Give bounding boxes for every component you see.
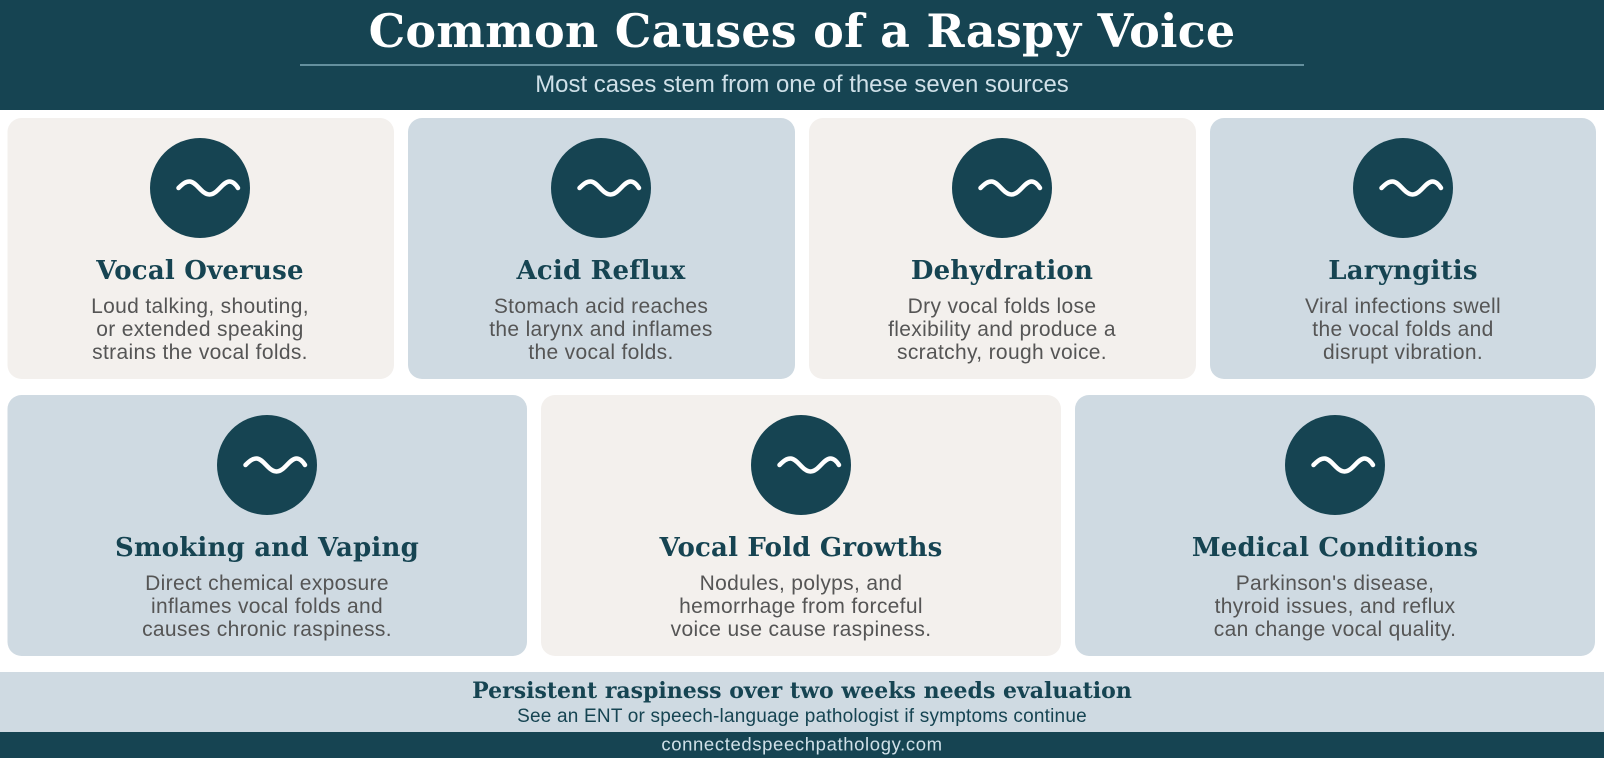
card: Dehydration: Dehydration xyxy=(911,256,1093,286)
card: Smoking and Vaping: causes chronic raspiness. xyxy=(142,618,392,641)
card: Smoking and Vaping: Smoking and Vaping xyxy=(115,533,419,563)
icon: sound wave xyxy=(551,138,651,238)
card: Medical Conditions: Medical Conditions xyxy=(1192,533,1478,563)
card: Acid Reflux xyxy=(408,118,795,379)
icon: sound wave xyxy=(751,415,851,515)
card: Laryngitis: Laryngitis xyxy=(1328,256,1478,286)
card: Laryngitis: disrupt vibration. xyxy=(1323,341,1483,364)
callout xyxy=(0,672,1604,732)
card: Smoking and Vaping xyxy=(8,395,527,656)
card: Medical Conditions: can change vocal quality. xyxy=(1214,618,1456,641)
card: Smoking and Vaping: Direct chemical exposure xyxy=(145,572,389,595)
card: Acid Reflux: the larynx and inflames xyxy=(489,318,713,341)
card: Vocal Overuse: Vocal Overuse xyxy=(95,256,304,286)
card: Laryngitis xyxy=(1210,118,1596,379)
card: Dehydration xyxy=(809,118,1196,379)
card: Vocal Overuse: strains the vocal folds. xyxy=(92,341,308,364)
icon: sound wave xyxy=(1353,138,1453,238)
card: Medical Conditions xyxy=(1075,395,1595,656)
card: Vocal Fold Growths: voice use cause raspiness. xyxy=(671,618,931,641)
card: Medical Conditions: Parkinson's disease, xyxy=(1236,572,1434,595)
icon: sound wave xyxy=(217,415,317,515)
card: Vocal Overuse: or extended speaking xyxy=(96,318,304,341)
card: Dehydration: Dry vocal folds lose xyxy=(908,295,1096,318)
card: Laryngitis: Viral infections swell xyxy=(1305,295,1501,318)
card: Medical Conditions: thyroid issues, and reflux xyxy=(1215,595,1456,618)
card: Dehydration: scratchy, rough voice. xyxy=(897,341,1107,364)
title: Common Causes of a Raspy Voice xyxy=(369,4,1235,58)
icon: sound wave xyxy=(1285,415,1385,515)
callout: See an ENT or speech-language pathologist if symptoms continue xyxy=(517,706,1087,727)
card: Smoking and Vaping: inflames vocal folds and xyxy=(151,595,383,618)
card: Acid Reflux: Acid Reflux xyxy=(516,256,686,286)
footer: connectedspeechpathology.com xyxy=(661,734,943,754)
card: Vocal Fold Growths xyxy=(541,395,1061,656)
icon: sound wave xyxy=(952,138,1052,238)
card: Vocal Overuse: Loud talking, shouting, xyxy=(91,295,309,318)
callout: Persistent raspiness over two weeks needs evaluation xyxy=(472,678,1132,704)
card: Acid Reflux: Stomach acid reaches xyxy=(494,295,708,318)
card: Vocal Overuse xyxy=(8,118,394,379)
card: Vocal Fold Growths: hemorrhage from forceful xyxy=(679,595,923,618)
footer xyxy=(0,732,1604,758)
icon: sound wave xyxy=(150,138,250,238)
card: Acid Reflux: the vocal folds. xyxy=(528,341,674,364)
card: Dehydration: flexibility and produce a xyxy=(888,318,1116,341)
subtitle: Most cases stem from one of these seven sources xyxy=(535,71,1069,98)
header band xyxy=(0,0,1604,110)
card: Vocal Fold Growths: Vocal Fold Growths xyxy=(658,533,942,563)
card: Laryngitis: the vocal folds and xyxy=(1312,318,1494,341)
card: Vocal Fold Growths: Nodules, polyps, and xyxy=(700,572,902,595)
